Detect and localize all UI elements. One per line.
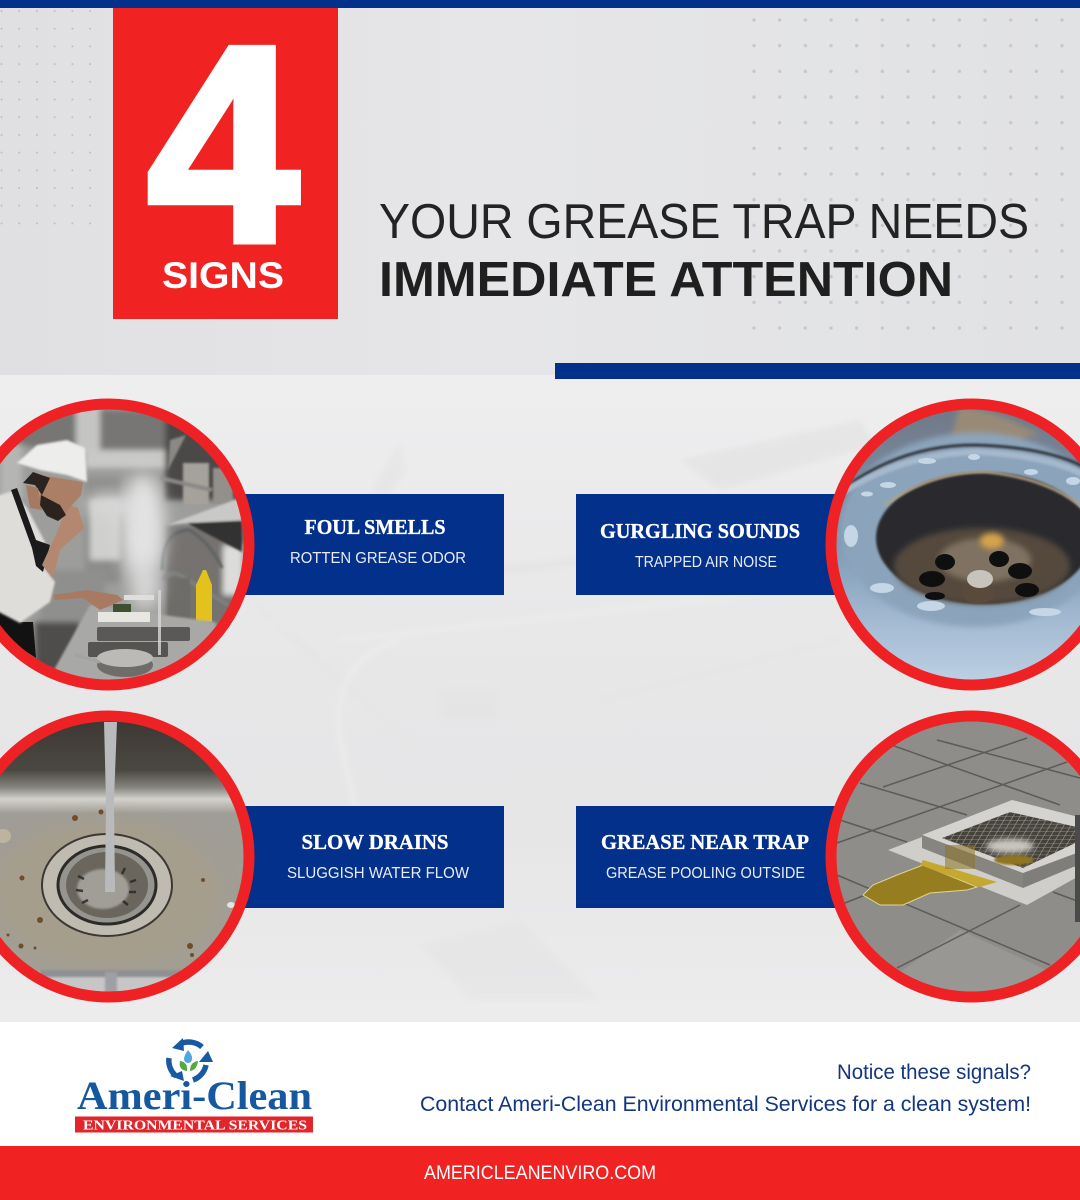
photo: grease pooling near floor trap bbox=[820, 712, 1080, 1010]
floor photo background bbox=[0, 375, 1080, 1022]
raised arm and hand bbox=[42, 505, 84, 578]
head bbox=[40, 475, 83, 520]
photo: chef smelling odor in kitchen bbox=[0, 400, 260, 690]
counter and sinks bbox=[54, 605, 216, 680]
droplets bbox=[844, 454, 1080, 616]
drain holes bbox=[935, 554, 955, 570]
call to action: Contact Ameri-Clean Environmental Services for a clean system! bbox=[420, 1093, 1031, 1116]
call to action bbox=[420, 1061, 1031, 1116]
steam bbox=[86, 474, 165, 609]
header background bbox=[0, 0, 1080, 376]
card: slow drains bbox=[245, 806, 504, 908]
card: gurgling sounds bbox=[576, 494, 835, 595]
trap frame bbox=[922, 800, 1075, 862]
apron strap and bib bbox=[11, 488, 50, 572]
chef hat bbox=[17, 440, 87, 482]
yellow bottle bbox=[196, 570, 212, 622]
lower apron bbox=[0, 611, 36, 658]
white jacket bbox=[0, 491, 55, 623]
card: slow drains: SLUGGISH WATER FLOW bbox=[287, 865, 469, 882]
title bbox=[379, 195, 1029, 307]
logo bbox=[75, 1038, 313, 1132]
photo: slow drain with running water bbox=[0, 712, 260, 1007]
icon: recycle arrows with droplet and leaves bbox=[169, 1038, 213, 1081]
shelf, pots and faucet bbox=[160, 435, 242, 618]
red ring bbox=[0, 716, 249, 997]
grease pool bbox=[863, 865, 977, 905]
top blue bar bbox=[0, 0, 1080, 8]
trap base plate bbox=[888, 837, 1080, 905]
red badge: 4 signs bbox=[113, 0, 338, 319]
red ring bbox=[0, 404, 249, 685]
logo wordmark: Ameri-Clean bbox=[77, 1073, 312, 1118]
water stream bbox=[104, 722, 117, 892]
post bbox=[1075, 815, 1080, 922]
tile grout lines bbox=[837, 738, 1080, 968]
second arm bbox=[53, 590, 123, 610]
title: YOUR GREASE TRAP NEEDS bbox=[379, 195, 1029, 249]
title: IMMEDIATE ATTENTION bbox=[379, 253, 953, 307]
trap grate bbox=[942, 812, 1080, 868]
red ring bbox=[831, 716, 1080, 997]
card: grease near trap: GREASE NEAR TRAP bbox=[601, 830, 809, 854]
drain rings bbox=[42, 834, 172, 936]
inner drain walls bbox=[876, 472, 1080, 604]
card: grease near trap: GREASE POOLING OUTSIDE bbox=[606, 865, 805, 882]
card: slow drains: SLOW DRAINS bbox=[302, 830, 448, 854]
call to action: Notice these signals? bbox=[837, 1061, 1031, 1084]
water pool bbox=[894, 528, 1070, 604]
footer red band with website: AMERICLEANENVIRO.COM bbox=[424, 1163, 656, 1184]
card: foul smells: FOUL SMELLS bbox=[304, 515, 446, 539]
grime specks bbox=[6, 810, 205, 957]
signs label: SIGNS bbox=[162, 255, 284, 296]
section divider bar bbox=[555, 363, 1080, 379]
card: grease near trap bbox=[576, 806, 835, 908]
logo tagline: ENVIRONMENTAL SERVICES bbox=[83, 1118, 307, 1132]
chef bbox=[0, 440, 123, 658]
card: gurgling sounds: TRAPPED AIR NOISE bbox=[635, 554, 777, 571]
footer white band bbox=[0, 1022, 1080, 1146]
pan bbox=[97, 661, 153, 677]
red ring bbox=[831, 404, 1080, 685]
card: gurgling sounds: GURGLING SOUNDS bbox=[600, 519, 800, 543]
footer red band with website bbox=[0, 1146, 1080, 1200]
card: foul smells: ROTTEN GREASE ODOR bbox=[290, 550, 466, 567]
card: foul smells bbox=[245, 494, 504, 595]
photo: gurgling drain bbox=[820, 400, 1080, 690]
